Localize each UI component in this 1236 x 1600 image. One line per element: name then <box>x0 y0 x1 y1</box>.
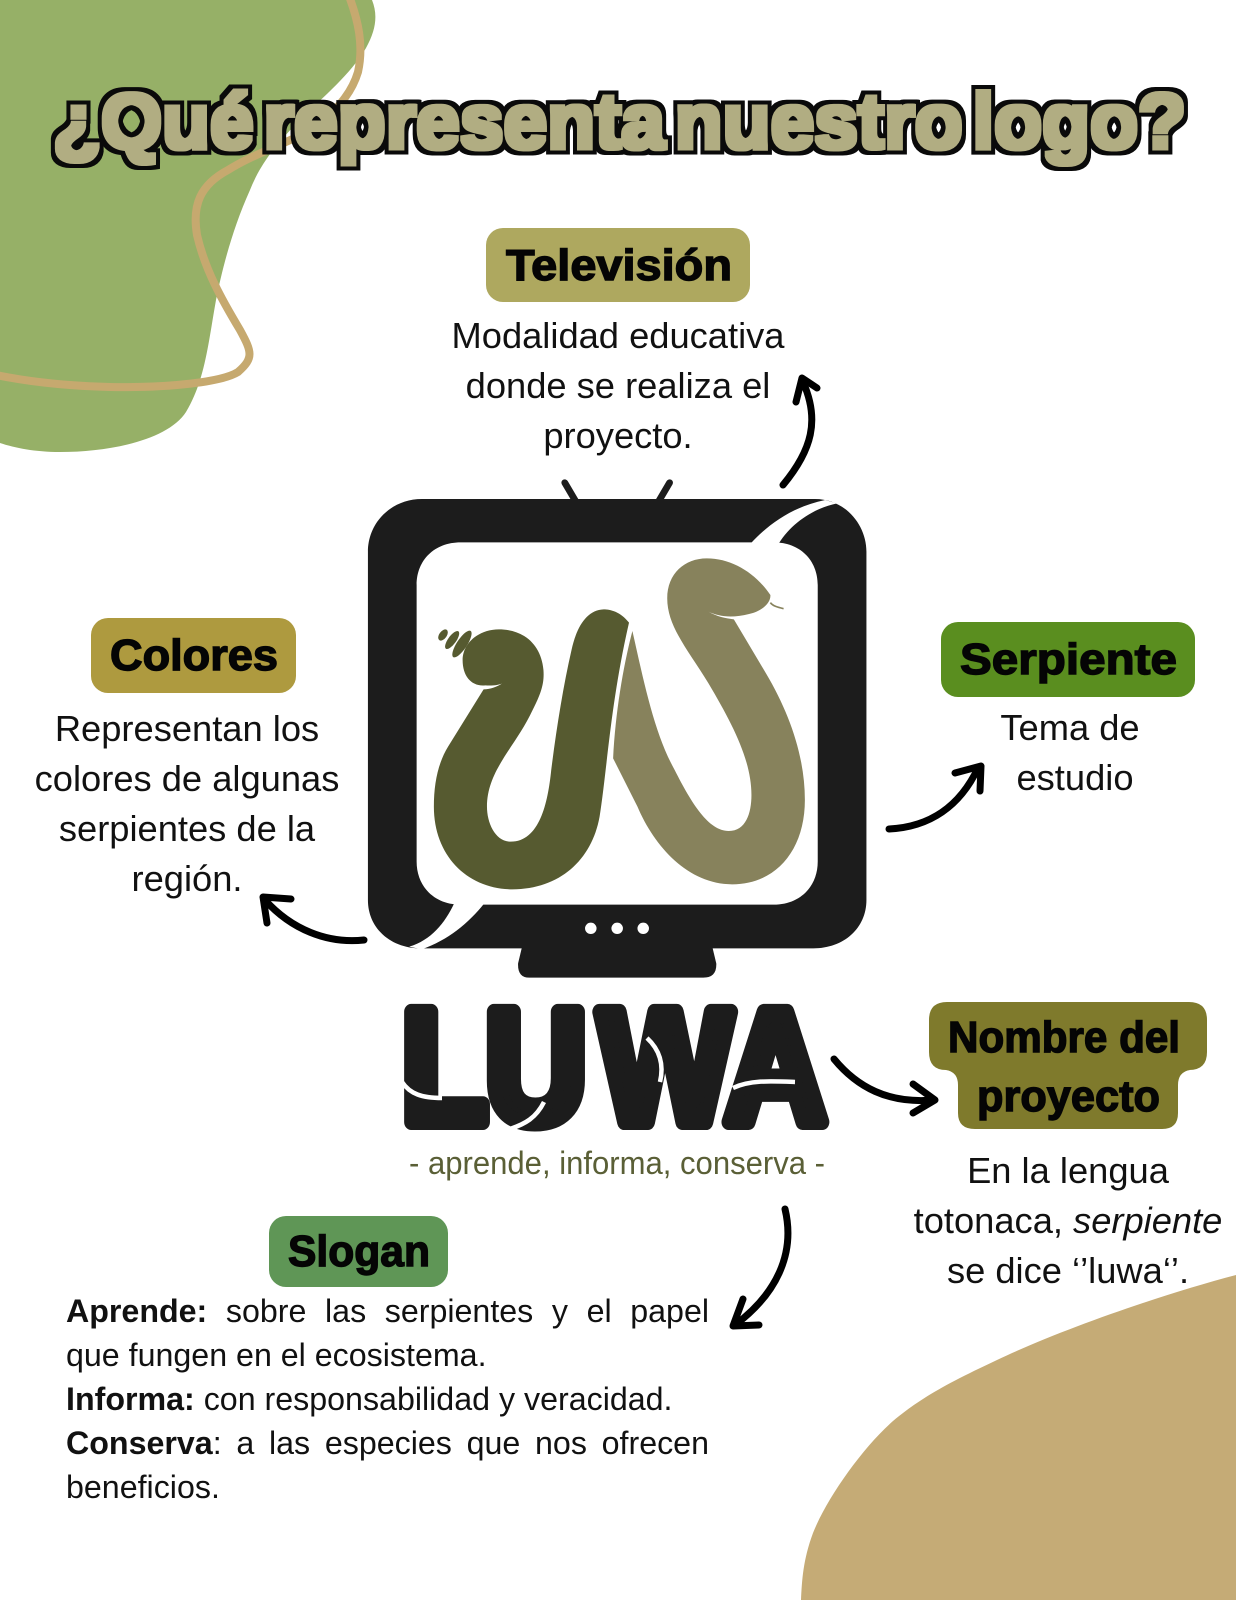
antennas <box>565 483 670 502</box>
label: slogan: Slogan <box>288 1227 430 1276</box>
label: televisión: Televisión <box>506 241 732 290</box>
slogan description: beneficios. <box>66 1469 220 1505</box>
slogan description: Conserva: a las especies que nos ofrecen <box>66 1425 709 1461</box>
speech swoosh bottom-left <box>409 903 484 949</box>
slogan description: Informa: con responsabilidad y veracidad. <box>66 1381 672 1417</box>
description: nombre del proyecto: se dice ‘’luwa‘’. <box>947 1250 1189 1291</box>
description: televisión: donde se realiza el <box>466 365 770 406</box>
stand <box>518 945 716 978</box>
arrow: to serpiente <box>889 766 981 829</box>
description: televisión: proyecto. <box>543 415 693 456</box>
panel: nombre del proyecto <box>914 1002 1222 1291</box>
speech swoosh top-right <box>751 500 837 543</box>
description: colores: región. <box>132 858 242 899</box>
label: proyecto: proyecto <box>977 1072 1160 1121</box>
description: colores: colores de algunas <box>35 758 339 799</box>
tan blob bottom-right <box>801 1275 1236 1600</box>
label box: colores <box>91 618 296 693</box>
description: nombre del proyecto: En la lengua <box>967 1150 1170 1191</box>
description: colores: serpientes de la <box>59 808 316 849</box>
rattle <box>436 628 475 660</box>
snake tongue <box>770 603 784 609</box>
description: colores: Representan los <box>55 708 319 749</box>
light snake <box>613 558 805 884</box>
label box: serpiente <box>941 622 1195 697</box>
arrow: to colores <box>263 897 364 941</box>
label: colores: Colores <box>110 631 278 680</box>
arrow: to nombre del proyecto <box>834 1059 935 1113</box>
wordmark LUWA <box>402 977 826 1181</box>
green blob top-left <box>0 0 375 452</box>
wordmark text: LUWA <box>402 977 826 1156</box>
description: televisión: Modalidad educativa <box>452 315 785 356</box>
description: serpiente: Tema de <box>1000 707 1140 748</box>
panel: televisión <box>452 228 785 456</box>
tagline: - aprende, informa, conserva - <box>409 1145 825 1181</box>
arrow: to televisión <box>783 378 817 485</box>
indicator dots <box>585 923 649 934</box>
panel: colores <box>35 618 339 899</box>
panel: slogan label <box>269 1216 448 1287</box>
label: serpiente: Serpiente <box>960 635 1177 684</box>
label box: slogan <box>269 1216 448 1287</box>
label box: nombre del proyecto <box>929 1002 1207 1129</box>
label box: televisión <box>486 228 750 302</box>
screen frame <box>368 499 866 948</box>
tan squiggle line <box>0 0 360 387</box>
label: nombre del: Nombre del <box>948 1013 1180 1062</box>
description: nombre del proyecto: totonaca, serpiente <box>914 1200 1222 1241</box>
logo: television with snakes <box>368 483 866 978</box>
description: serpiente: estudio <box>1016 757 1134 798</box>
slogan description: Aprende: sobre las serpientes y el papel <box>66 1293 709 1329</box>
dark snake <box>434 609 629 889</box>
title: ¿Qué representa nuestro logo? <box>53 77 1186 165</box>
slogan description <box>66 1293 709 1505</box>
slogan description: que fungen en el ecosistema. <box>66 1337 487 1373</box>
panel: serpiente <box>941 622 1195 798</box>
arrow: to slogan <box>733 1209 788 1326</box>
